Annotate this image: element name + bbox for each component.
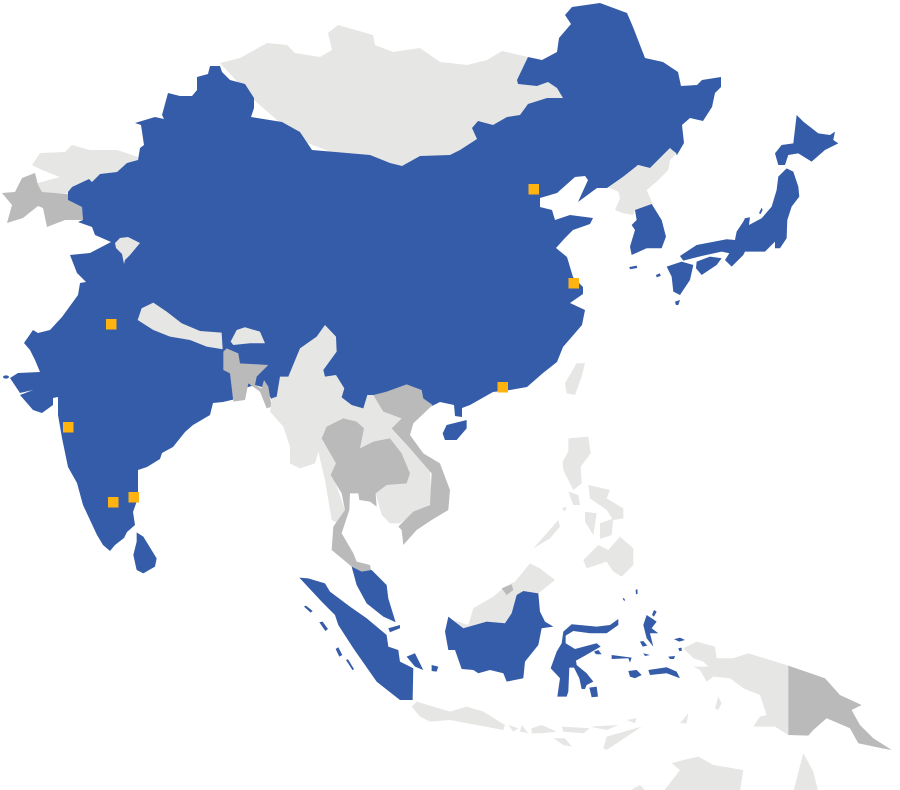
Thailand bbox=[322, 418, 410, 577]
location marker: south China bbox=[498, 382, 508, 392]
Vietnam bbox=[373, 384, 450, 545]
location marker: south India inland bbox=[108, 497, 118, 508]
Malaysian Borneo bbox=[453, 563, 555, 628]
location marker: east China bbox=[568, 278, 579, 288]
location marker: north India bbox=[106, 319, 116, 330]
location marker: north China bbox=[528, 184, 539, 194]
Australia bbox=[628, 753, 818, 790]
Bangladesh bbox=[223, 348, 272, 408]
China and India bbox=[10, 3, 721, 551]
Philippines bbox=[533, 437, 633, 577]
Taiwan bbox=[565, 363, 585, 395]
Bhutan bbox=[231, 327, 265, 345]
Sulawesi bbox=[551, 619, 618, 697]
Kalimantan bbox=[445, 591, 553, 682]
Papua New Guinea bbox=[788, 666, 892, 750]
Kashmir patch bbox=[115, 237, 140, 264]
Tajikistan bbox=[2, 173, 83, 227]
Myanmar, Laos and Cambodia bbox=[270, 325, 432, 523]
North Korea bbox=[608, 148, 677, 215]
Java and Lesser Sunda islands bbox=[412, 697, 722, 750]
Sri Lanka bbox=[133, 532, 157, 573]
Sumatra and neighbouring islands bbox=[299, 578, 438, 700]
location marker: west India bbox=[63, 422, 74, 432]
Kyrgyzstan and Kazakhstan sliver bbox=[22, 145, 138, 193]
Western New Guinea bbox=[683, 642, 788, 735]
Gujarat islet bbox=[3, 375, 9, 379]
location marker: south India coast bbox=[128, 492, 139, 502]
Maluku islands bbox=[612, 589, 685, 678]
Hainan bbox=[443, 420, 467, 440]
Nepal bbox=[138, 303, 223, 349]
Brunei bbox=[502, 584, 513, 595]
Japan bbox=[656, 115, 838, 305]
Peninsular Malaysia bbox=[352, 567, 396, 622]
Mongolia bbox=[220, 25, 563, 180]
South Korea bbox=[629, 204, 666, 269]
